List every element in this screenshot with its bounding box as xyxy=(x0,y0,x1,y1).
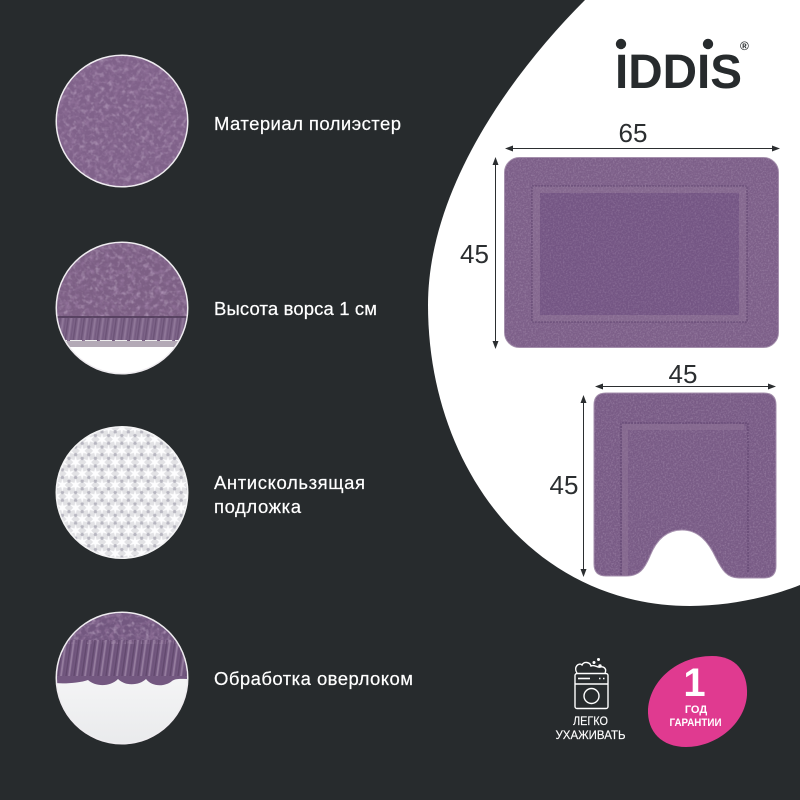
pink blob xyxy=(648,656,747,747)
dimension: width 45 xyxy=(595,359,776,390)
feature: pile height xyxy=(55,242,377,374)
swatch: white patterned backing xyxy=(56,426,188,559)
badge: 1 year warranty xyxy=(648,656,747,747)
dimension: height 45 xyxy=(550,395,586,577)
white curved panel xyxy=(428,0,800,606)
dimension: height 45 xyxy=(460,157,498,349)
swatch: fleece texture xyxy=(56,54,188,188)
feature: anti-slip backing xyxy=(56,426,365,559)
label: подложка xyxy=(214,496,302,517)
contour toilet mat 45x45 xyxy=(550,359,776,578)
dimension: height 45: 45 xyxy=(550,470,578,500)
mat body xyxy=(504,158,778,348)
feature: overlock edge xyxy=(55,612,413,746)
dimension: height 45: 45 xyxy=(460,239,489,269)
icon: washing machine with foam xyxy=(575,658,608,708)
dimension: width 65 xyxy=(505,118,780,152)
label: Высота ворса 1 см xyxy=(214,298,377,319)
mat body xyxy=(594,393,776,578)
label: Обработка оверлоком xyxy=(214,668,413,689)
label: easy care: УХАЖИВАТЬ xyxy=(556,728,626,742)
badge: easy care xyxy=(556,658,626,742)
swatch: overlock stitch xyxy=(55,612,189,746)
label: Материал полиэстер xyxy=(214,113,401,134)
swatch: pile side view xyxy=(55,242,189,374)
label: easy care: ЛЕГКО xyxy=(573,714,608,728)
warranty text: ГОД xyxy=(685,704,707,716)
label: Антискользящая xyxy=(214,472,365,493)
warranty text: 1 xyxy=(683,661,706,705)
logo: IDDIS: ® xyxy=(740,39,749,53)
dimension: width 65: 65 xyxy=(619,118,647,148)
feature: material polyester xyxy=(56,54,401,188)
warranty text: ГАРАНТИИ xyxy=(670,717,722,729)
logo: IDDIS: IDDIS xyxy=(615,46,742,99)
warranty text xyxy=(670,661,722,729)
dimension: width 45: 45 xyxy=(669,359,697,389)
rectangular mat 65x45 xyxy=(460,118,780,349)
